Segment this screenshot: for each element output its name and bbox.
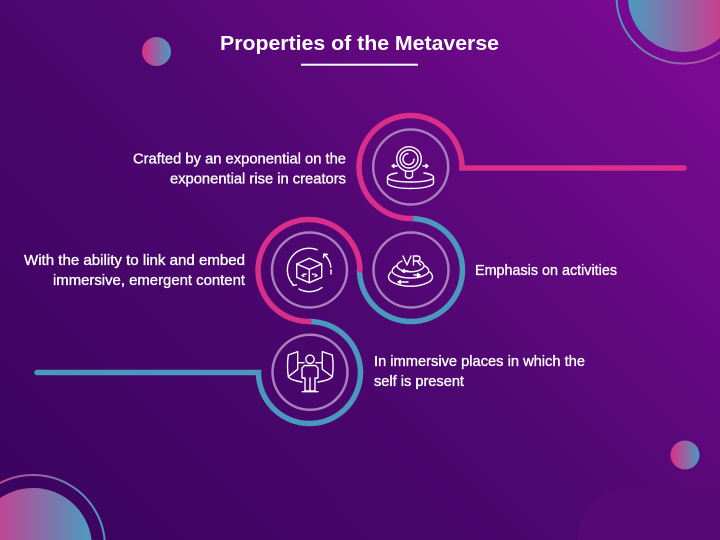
text: crafted: exponential rise in creators (170, 172, 346, 188)
text: link and embed: With the ability to link and embed (24, 253, 245, 269)
decorative dot top left (142, 37, 171, 66)
decorative circle bottom left (0, 475, 105, 540)
inner ring: cube (272, 232, 347, 308)
connector: blue arc and line bottom (37, 322, 361, 424)
decorative rounded shape bottom right (578, 488, 720, 540)
decorative circle top right (617, 0, 720, 64)
connector: magenta arc and line top (359, 116, 684, 219)
title: Properties of the Metaverse (220, 32, 499, 55)
text: link and embed: immersive, emergent content (53, 273, 245, 289)
icon: lens on platform (388, 147, 434, 188)
text: crafted: Crafted by an exponential on the (133, 152, 346, 168)
title underline (301, 64, 418, 66)
icon: VR on layered rings (389, 256, 432, 286)
text: crafted (133, 152, 346, 188)
connector: blue arc around VR circle (360, 218, 463, 322)
icon: person between screens (288, 352, 333, 392)
icon: cube with rotating arrows (287, 248, 331, 292)
text: immersive places (374, 354, 585, 390)
text: immersive places: self is present (374, 374, 464, 390)
text: activities: Emphasis on activities (475, 263, 617, 279)
decorative dot bottom right (670, 440, 700, 470)
inner ring: VR (374, 232, 448, 308)
text: immersive places: In immersive places in which the (374, 354, 585, 370)
inner ring: person (272, 335, 348, 410)
text: link and embed (24, 253, 245, 289)
connector: magenta arc left circle (258, 220, 360, 322)
inner ring: top (373, 130, 448, 204)
